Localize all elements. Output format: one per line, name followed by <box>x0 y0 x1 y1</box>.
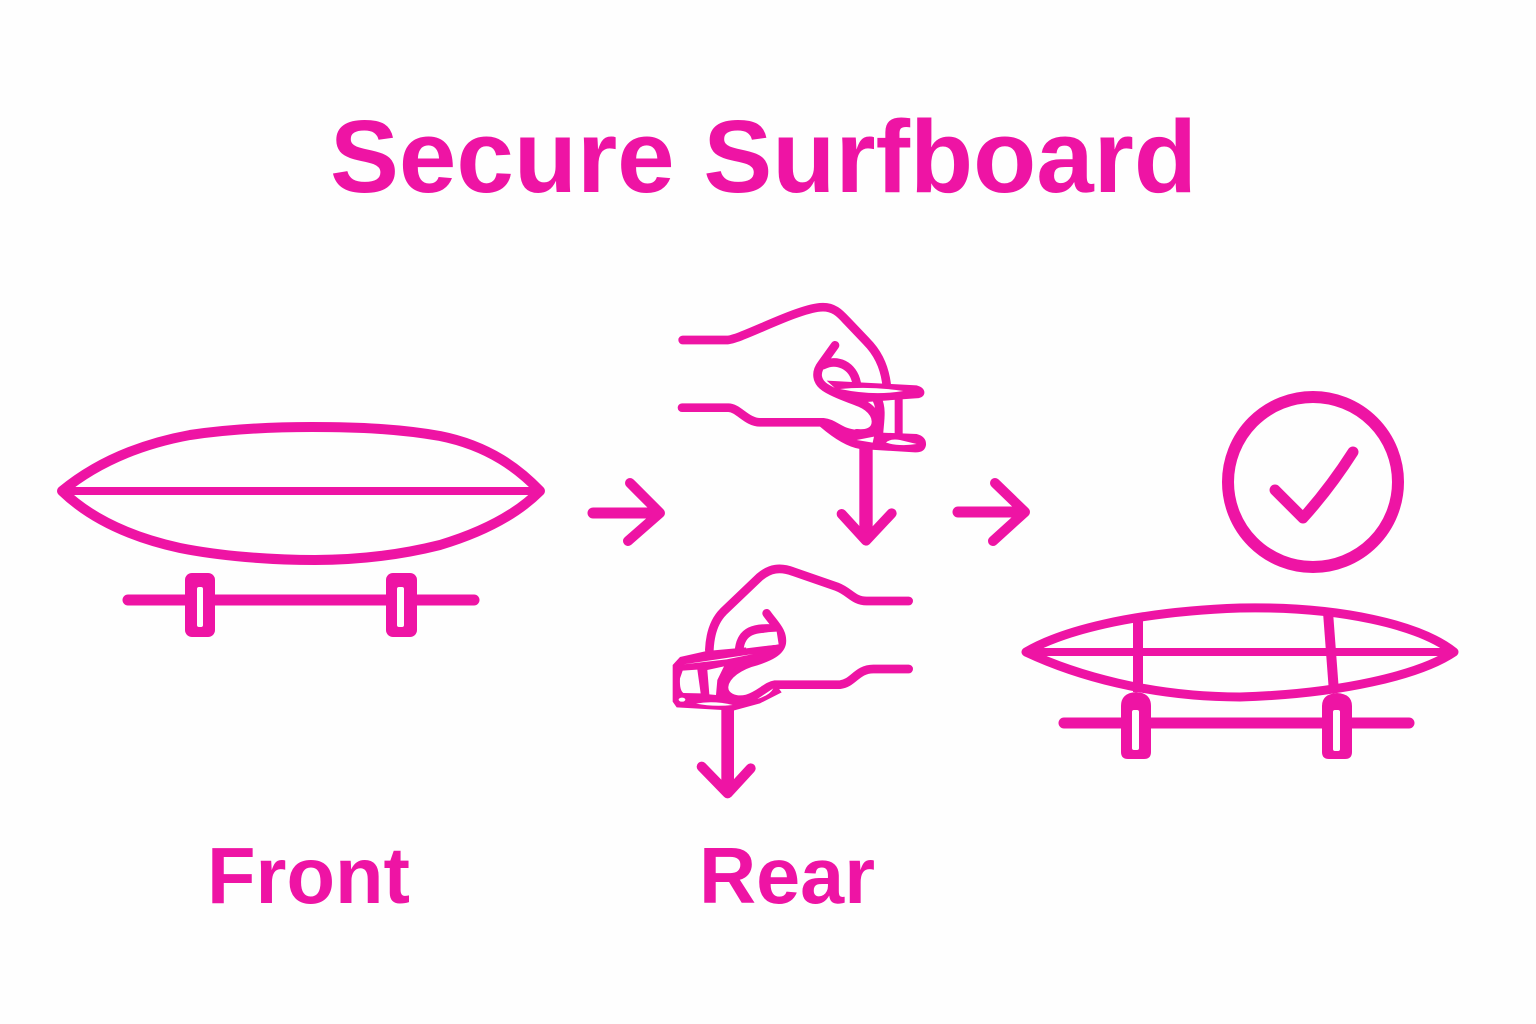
label: Rear: Rear <box>699 831 875 920</box>
icon: check mark in circle <box>1228 397 1398 567</box>
surfboard outline <box>62 427 540 560</box>
icon: hand tightening rear strap <box>673 569 909 793</box>
icon: surfboard with rack <box>62 427 540 637</box>
roof rack <box>1064 692 1409 759</box>
roof rack <box>128 573 474 637</box>
hand outline <box>709 569 909 700</box>
label: Front: Front <box>207 831 410 920</box>
surfboard outline <box>1026 608 1454 697</box>
icon: secured surfboard with straps <box>1026 608 1454 759</box>
strap buckle <box>820 369 926 452</box>
arrow: pull down <box>842 447 892 541</box>
arrow: to secured board <box>958 483 1025 541</box>
tie-down straps <box>1138 612 1334 692</box>
icon: hand tightening front strap <box>682 307 926 541</box>
hand outline <box>682 307 887 434</box>
title: Secure Surfboard <box>330 99 1197 214</box>
arrow: to hand steps <box>593 483 660 541</box>
strap buckle <box>673 632 782 711</box>
arrow: pull down <box>702 708 751 793</box>
